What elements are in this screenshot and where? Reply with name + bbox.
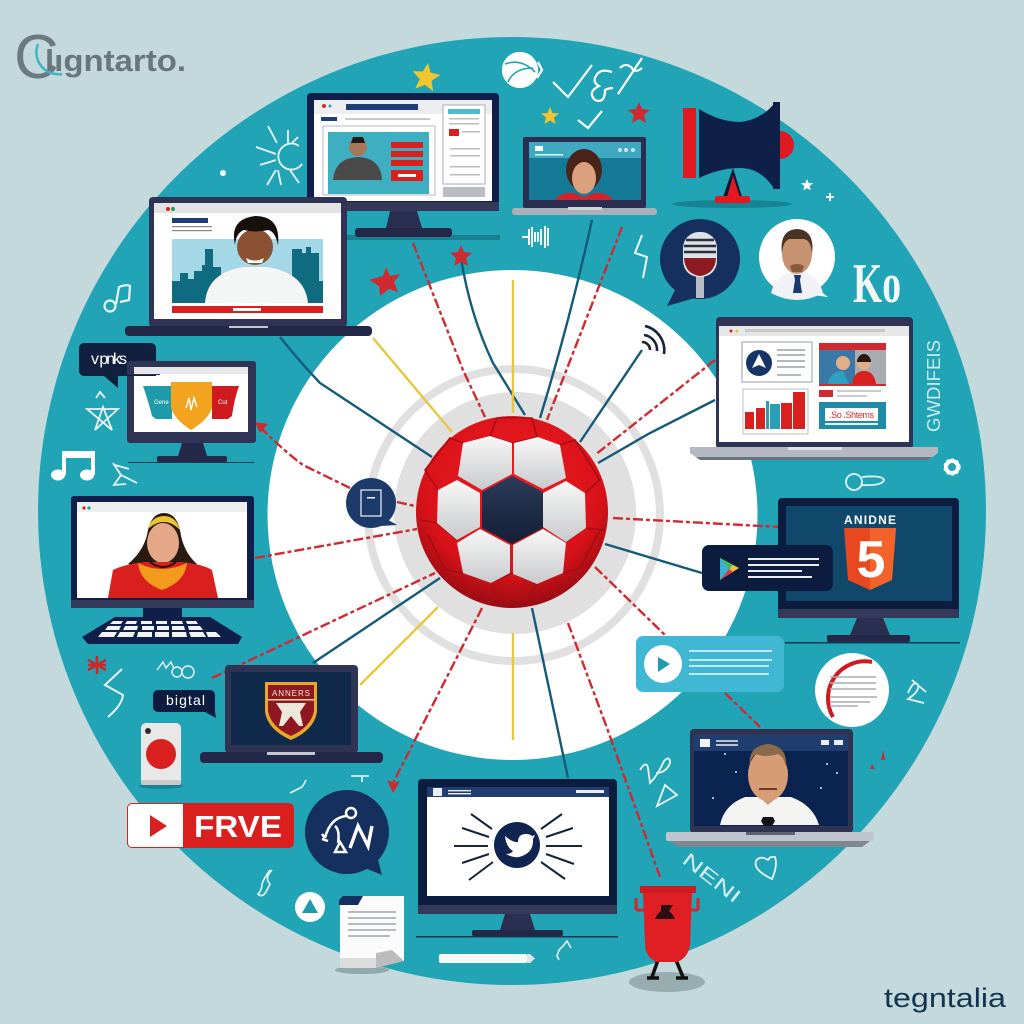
laptop: right dashboard: .So .Shtems — [829, 410, 874, 420]
sketch icons: top — [503, 53, 642, 128]
note circle — [815, 653, 889, 727]
concentric rings — [368, 369, 660, 661]
laptop: bottom left crest — [200, 665, 383, 763]
monitor: right html5: 5 — [857, 531, 885, 589]
pen — [439, 954, 535, 963]
white zigzag doodle — [635, 235, 647, 278]
monitor: right html5: ANIDNE — [844, 513, 896, 527]
laptop: bottom right man — [666, 729, 874, 847]
logo: lıgntarto. — [45, 43, 186, 78]
football — [416, 416, 608, 608]
arrowheads — [255, 422, 400, 793]
doodles left — [87, 392, 137, 485]
phone — [139, 723, 183, 789]
free button: FRVE — [194, 809, 282, 844]
play card — [702, 545, 833, 591]
monitor: left woman — [71, 496, 254, 644]
megaphone — [672, 102, 794, 208]
doodle: right side — [846, 474, 926, 703]
small chat icon — [346, 478, 397, 528]
monitor redraw over tag — [127, 361, 160, 375]
doodles lower left — [105, 662, 369, 896]
red mascot bin — [629, 886, 705, 992]
KO label: Ko — [853, 253, 901, 315]
red asterisk — [88, 656, 106, 674]
monitor: twitter — [416, 779, 618, 938]
free button — [127, 803, 294, 848]
red marks right — [870, 750, 885, 769]
microphone badge — [660, 219, 740, 306]
monitor: top centre — [307, 93, 500, 240]
stars — [220, 61, 834, 296]
triangle badge — [295, 892, 325, 922]
digital tag: bigtal — [166, 692, 205, 708]
monitor: left shield chart — [127, 361, 256, 463]
document — [335, 896, 404, 974]
music note large — [51, 451, 95, 480]
monitor: left shield chart: Gene — [154, 400, 169, 406]
sun doodle — [256, 126, 302, 185]
logo — [14, 23, 186, 92]
video message card — [636, 636, 784, 692]
logo: C — [14, 23, 59, 92]
doodles lower right — [640, 758, 677, 806]
brand wordmark: tegntalia — [884, 983, 1007, 1013]
presenter badge — [759, 219, 835, 300]
white centre circle — [268, 270, 758, 760]
heart doodle — [756, 857, 776, 879]
monitor: left shield chart: Cut — [218, 400, 228, 406]
laptop: right dashboard — [690, 317, 938, 460]
music notes doodle — [104, 285, 130, 312]
speech badge — [305, 790, 389, 875]
monitor: right html5 — [778, 498, 960, 644]
speech tag — [79, 343, 156, 388]
gear icon — [944, 459, 960, 475]
sound wave — [522, 226, 548, 248]
laptop: bottom left crest: ANNERS — [272, 689, 310, 698]
laptop: left man — [125, 197, 372, 336]
handwritten label: NENI — [678, 849, 744, 908]
wifi icon — [642, 326, 664, 354]
speech tag: v pnks — [91, 351, 127, 368]
connector lines — [212, 220, 780, 877]
doodles bottom centre — [557, 941, 571, 960]
laptop: top right woman — [512, 137, 657, 215]
vertical label: GWDIFEIS — [924, 340, 944, 432]
digital tag — [153, 690, 216, 718]
